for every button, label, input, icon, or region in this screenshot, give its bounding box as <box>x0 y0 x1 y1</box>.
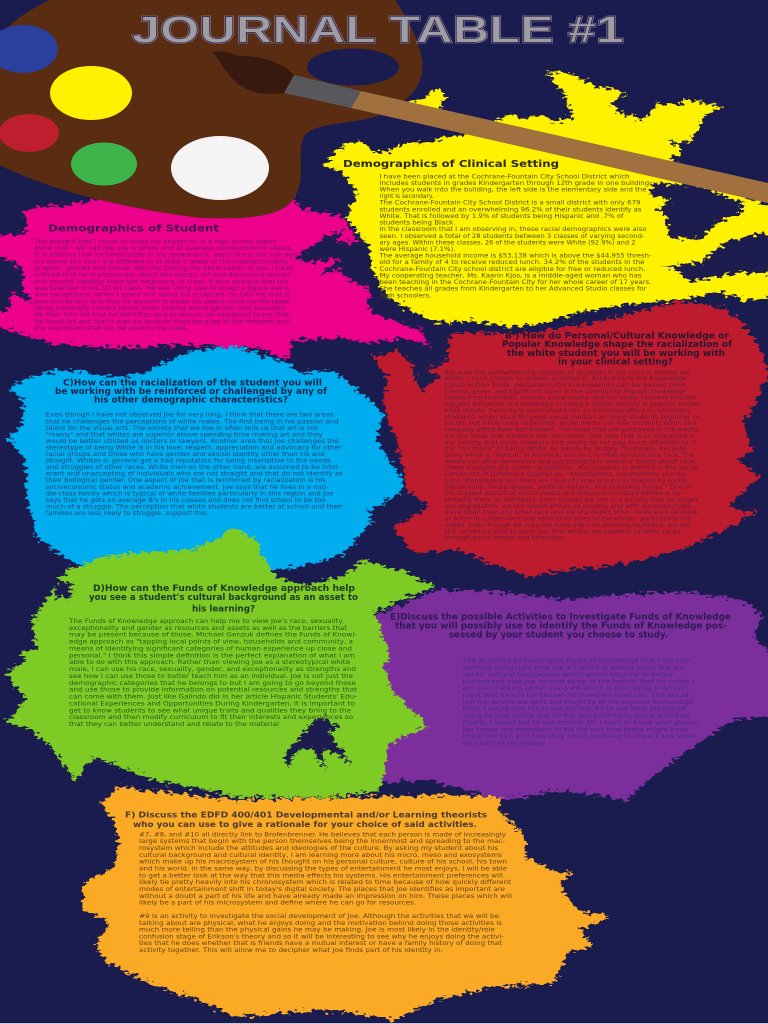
heading: question E <box>390 613 731 640</box>
body text: clinical setting: My cooperating teacher, Ms. Kaarin Kjos, is a middle-aged woman who has <box>380 272 642 280</box>
body text: question B answer: media can often generalize and put thoughts in viewers' minds about race. <box>444 457 696 465</box>
paint well: yellow <box>50 66 132 120</box>
heading: question F: F) Discuss the EDFD 400/401 Developmental and/or Learning theorists <box>125 811 487 820</box>
body text: student: graphic, gender and sexual identity. During my observation of Joe, I have <box>34 264 293 272</box>
body text: question F answer: modes of entertainment shift in today's digital society. The places that Joe identifies as important are <box>139 885 505 893</box>
body text: clinical setting: were Hispanic (7.1%). <box>380 245 456 253</box>
body text: clinical setting: right is secondary. <box>380 192 434 200</box>
body text: question F answer: ties that he does whether that is friends have a mutual interest or have a family history of doing that <box>139 939 503 947</box>
body text: question B answer: still communicated to each day that whites are superior to other races <box>444 527 681 535</box>
body text: question C answer: would be better utilized as doctors or lawyers. Another area that Joe challenges the <box>46 437 339 445</box>
panel: C racialization challenged (blue splat) <box>6 345 403 575</box>
body text: question D answer: male, I can use his race, sexuality, gender, and exceptionality as strengths and <box>69 665 356 673</box>
heading: demographics of student: Demographics of Student <box>48 224 219 235</box>
body text: question E answer: ment that he and his household members most use. This would <box>463 691 689 699</box>
body text: clinical setting <box>378 172 652 299</box>
body text: question D answer: get to know students to see what unique traits and qualities they bring to the <box>69 706 351 714</box>
body text: question D answer: demographic categories that he belongs to but I am going to go beyond those <box>69 679 356 687</box>
body text: question E answer: dents' cultural background which would help me to better <box>463 670 674 678</box>
body text: clinical setting: The Cochrane-Fountain City School District is a small district with only 679 <box>378 199 640 207</box>
body text: question B answer: Because the overwhelming majority of students in my clinical setting are <box>444 368 690 376</box>
body text: question C answer: much of a struggle. The perception that white students are better at school and their <box>46 502 343 510</box>
body text: question C answer: talent for the visual arts. The society that we live in often tells us that art is not <box>46 424 318 432</box>
orange paint splat <box>83 787 609 1020</box>
body text: question C answer: socioeconomic status and academic achievement. Joe says that he lives in a mid- <box>46 483 329 491</box>
body text: question B answer: males. Even though we may not have signs on drinking fountains, we are <box>444 521 690 529</box>
body text: question B answer: biggest influence of knowledge in today's digital society is popular knowl- <box>444 400 701 408</box>
body text: student: He then told me that he identifies as a bi-sexual. He explained to me that <box>34 311 290 319</box>
body text: student: more that I will call Joe. Joe is White and of average socioeconomic status. <box>34 244 293 252</box>
body text: question D answer: The Funds of Knowledge approach can help me to view Joe's race, sexuality, <box>68 617 345 625</box>
body text: clinical setting: In the classroom that I am observing in, these racial demographics were also <box>380 225 647 233</box>
body text: clinical setting: When you walk into the building, the left side is the elementary side and the <box>380 186 647 194</box>
body text: question F answer: without a doubt a part of his life and have already made an impression on him. These places which will <box>139 892 512 900</box>
body text: clinical setting: been teaching in the Cochrane-Fountain City for her whole career of 17 years. <box>380 278 652 286</box>
body text: question D answer: cational Experiences and Opportunities During Kindergarten, it is important to <box>69 700 355 708</box>
body text: question D answer: means of identifying significant categories of human experience up close and <box>69 644 352 652</box>
body text: clinical setting: White. That is followed by 1.9% of students being Hispanic and .7% of <box>380 212 624 220</box>
body text: question B answer: Constructs of Difference Graphic as, "expectations, assumptions, percep- <box>444 470 687 478</box>
body text: question D answer: and use those to provide information on potential resources and strengths that <box>69 686 358 694</box>
body text: question F answer: likely tie pretty heavily into his chronosystem which is related to time because of how quickly different <box>139 878 512 886</box>
heading: question F <box>125 811 487 829</box>
body text: question B answer: tions, stereotypes and fears we have of racial groups as shaped by social <box>444 476 687 484</box>
body text: question E answer: tell me where Joe gets the majority of his popular knowledge <box>463 698 694 706</box>
heading: question D: you see a student's cultural background as an asset to <box>89 593 358 603</box>
body text: question D answer: edge approach as "tapping local points of view, households and community, a <box>69 638 353 646</box>
body text: question B answer: being white is "normal" in America, and so it is often ignored as a race. The <box>444 451 694 459</box>
body text: question B answer: These thoughts are called racialization. Racialization is defined in the Social <box>443 464 699 472</box>
body text: clinical setting: high schoolers. <box>380 291 432 299</box>
body text: student: It is obvious that he takes pride in his appearance, particularly his hair and <box>34 251 297 259</box>
body text: question B answer: the biggest ways that social media and television racialize whites is by <box>444 489 681 497</box>
body text: question E answer: from. I would also like to use activity #9 to see what Joe enjoys <box>463 705 686 713</box>
body text: student <box>33 237 297 332</box>
body text: clinical setting: Cochrane-Fountain City school district are eligible for free or reduced lunch. <box>380 265 646 273</box>
body text: student: The student that I chose to focus my project on is a high school sopho- <box>33 237 279 245</box>
heading: question B: B ) How do Personal/Cultural Knowledge or <box>505 331 730 341</box>
body text: student: noticed that he is passionate about two things, art and discussing sexual <box>34 271 290 279</box>
brush handle <box>351 91 768 203</box>
body text: question F answer: and his world. In the same way, by discussing the types of entertainment he most enjoys, I will be able <box>139 864 507 872</box>
panel: D funds of knowledge (green splat) <box>6 527 435 797</box>
heading: question D <box>89 584 358 615</box>
body text: question C answer: "manly" and that whites are superior above spending time making art and they <box>46 430 323 438</box>
body text: student: was non-binary and that he wanted to make his peers more comfortable <box>34 297 289 305</box>
body text: clinical setting: students enrolled and an overwhelming 96.2% of their students identify as <box>380 205 642 213</box>
body text: question B answer: issues, but when used negatively, social media can tear students down and <box>444 419 696 427</box>
body text: question B answer: are the ideas that students will internalize. One idea that is so engrained in <box>444 432 695 440</box>
paint well: green <box>71 142 137 186</box>
body text: question B answer: edge outlets. Particularly social media has an enormous effect on secondary <box>444 406 691 414</box>
body text: clinical setting: students being Black. <box>380 219 456 227</box>
heading: question D: his learning? <box>192 605 255 615</box>
panel: demographics of student (pink splat) <box>0 195 430 360</box>
body text: student: the expression that can be used in the class. <box>34 324 188 332</box>
purple paint splat <box>365 590 768 800</box>
body text: question B answer: our society that most students and adults do not pay much attention to is <box>444 438 697 446</box>
body text: question C answer: racial groups and those who have gender and sexual identity other than cis and <box>46 450 325 458</box>
icon: paint brush <box>212 51 768 203</box>
title: JOURNAL TABLE #1 <box>132 10 624 52</box>
body text: question E answer: Joe thinks are important in his life and how these might have <box>462 725 689 733</box>
body text: student: he loved Art and that it was his favorite class because of the freedom and <box>34 317 289 325</box>
body text: clinical setting: old for a family of 4 to receive reduced lunch. 34.2% of the students in the <box>380 258 645 266</box>
paint well: white <box>171 136 269 200</box>
yellow paint splat <box>323 72 768 327</box>
panel: demographics of clinical setting (yellow splat) <box>323 72 768 327</box>
body text: question F answer: #9 is an activity to investigate the social development of Joe. Although the activities that we will be <box>139 912 499 920</box>
body text: question B answer: through social media and television. <box>444 534 566 542</box>
body text: question B answer: more often than any other race and we still depict other races such as black <box>444 508 699 516</box>
body text: question B answer: or Asian in subservient and secondary roles to the whites, particularly the <box>444 515 691 523</box>
body text: question F answer: confusion stage of Erikson's theory and so it will be interesting to see why he enjoys doing the activi- <box>139 932 504 940</box>
heading: question E: that you will possibly use to identify the Funds of Knowledge pos- <box>395 622 727 632</box>
body text: question F answer: much more telling than the physical gains he may be making. Joe is most likely in the identity/role <box>139 926 495 934</box>
body text: clinical setting: includes students in grades Kindergarten through 12th grade in one building. <box>380 179 652 187</box>
icon: artist palette with paint wells <box>0 0 422 218</box>
blue paint splat <box>6 345 403 575</box>
body text: clinical setting: I have been placed at the Cochrane-Fountain City School District which <box>380 172 630 180</box>
body text: clinical setting: She teaches all grades from Kindergarten to her Advanced Studio classes for <box>380 285 647 293</box>
brush ferrule <box>284 75 361 108</box>
body text: question E answer: Finally, I would like to use activity 10. I want to know what places <box>463 718 698 726</box>
body text: question C answer: straight. Whites in general get a bad reputation for being insensitive to the needs <box>46 457 331 465</box>
body text: question B answer: interactions, media images, political rhetoric, and economic forces." One of <box>444 483 692 491</box>
body text: question E answer: The Activities to Investigate Funds of Knowledge that I am con- <box>462 657 692 665</box>
body text: clinical setting: The average household income is $53,138 which is above the $44,955 thresh- <box>378 252 652 260</box>
body text: question F answer: talking about are physical, what he enjoys doing and the motivation behind doing those activities is <box>139 919 503 927</box>
heading: question E: sessed by your student you choose to study. <box>449 630 668 640</box>
body text: question E answer: impacted him and how they could continue to impact and serve <box>463 732 697 740</box>
body text: question D answer: exceptionality and gender as resources and assets as well as the barriers that <box>69 624 348 632</box>
body text: question D answer <box>68 617 358 728</box>
body text: question E answer: sidering using right now are #7 which is asking about the stu- <box>463 664 687 672</box>
body text: question C answer: erant and unaccepting of individuals who are not straight and that do not identify as <box>46 470 343 478</box>
body text: question E answer <box>462 657 698 747</box>
panel: B racialization (red splat) <box>373 302 768 577</box>
title: JOURNAL TABLE #1 <box>132 10 624 52</box>
palette thumb hole <box>307 48 399 86</box>
body text: question F answer: #7, #8, and #10 all directly link to Brofenbrenner. He believes that each person is made of increasingly <box>139 830 506 838</box>
brush bristles <box>212 51 294 94</box>
body text: question B answer: parents, peers, and significant other in the community. Popular knowledge <box>444 387 685 395</box>
body text: question D answer: personal." I think this simple definition is the perfect explanation of what I am <box>69 651 355 659</box>
body text: question B answer: comes from television, movies, social media, and the news. I believe that the <box>444 394 696 402</box>
body text: question E answer: doing to stay active and for fun and potentially social activities. <box>463 712 692 720</box>
body text: question C answer: that he challenges the perceptions of white males. The first being in his passion and <box>46 417 339 425</box>
body text: question F answer: activity together. This will allow me to decipher what Joe finds part of his identity in. <box>139 946 443 954</box>
body text: student: was talented in his 3D art class. He was using clay to sculpt a figure and it <box>34 284 290 292</box>
body text: question C answer: says that he gets on average B's in his classes and does not find school to be too <box>46 496 326 504</box>
body text: student: his shoes. Joe and I are different in at least 2 areas of the intersectionality <box>34 257 289 265</box>
body text: question F answer: rosystem which include the attitudes and ideologies of the culture. By asking my student about his <box>139 844 499 852</box>
body text: question D answer: can come with them. Just like Galindo did in her article Hispanic Students' Edu- <box>69 693 357 701</box>
heading: question C: his other demographic characteristics? <box>94 396 288 406</box>
body text: question C answer <box>46 411 343 517</box>
panel: F developmental theorists (orange splat) <box>83 787 609 1020</box>
heading: question B: in your clinical setting? <box>558 358 673 368</box>
body text: question D answer: that they can better understand and relate to the material <box>69 720 279 728</box>
heading: demographics of clinical setting: Demographics of Clinical Setting <box>343 159 559 170</box>
body text: question E answer: understand how Joe formed some of the beliefs that he holds. I <box>463 677 695 685</box>
heading: question D: D)How can the Funds of Knowledge approach help <box>93 584 355 594</box>
heading: question B: the white student you will be working with <box>507 349 725 359</box>
green paint splat <box>6 527 435 797</box>
pink paint splat <box>0 195 430 360</box>
body text: question D answer: able to do with this approach. Rather than viewing Joe as a stereotypical white <box>69 658 350 666</box>
body text: question F answer: which make up his macrosystem of his thought on his personal culture, culture of his school, his town <box>139 858 507 866</box>
body text: question F answer: to get a better look at the way that this media effects his systems. His entertainment preferences will <box>139 871 503 879</box>
body text: question B answer: has segregation, we still depict whites as wealthy and with successful jobs <box>444 502 692 510</box>
body text: question C answer: families are less likely to struggle, support this. <box>46 509 209 517</box>
body text: question D answer: may be present because of those. Michael Genzuk defines the Funds of Knowl- <box>69 631 357 639</box>
red paint splat <box>373 302 768 577</box>
body text: question F answer <box>139 830 512 954</box>
body text: question E answer: am also thinking about using #8 which is discussing entertain- <box>463 684 690 692</box>
body text: question D answer: classroom and then modify curriculum to fit their interests and experiences so <box>69 713 353 721</box>
body text: question B answer: showing them as dominant. Even though we live in a society that no longer <box>444 496 699 504</box>
body text: question B answer: white, I have chosen to answer question B. According to the Knowledge <box>444 375 686 383</box>
paint well: blue <box>0 25 58 73</box>
body text: student: using politically correct terms when talking about gender and sexuality. <box>34 304 286 312</box>
body text: question C answer: their biological gender. One aspect of Joe that is reinforced by racialization is his <box>46 476 326 484</box>
body text: question C answer: stereotype of being White is in his love, respect, appreciation and advocacy for other <box>46 444 342 452</box>
body text: question E answer: as a fund of knowledge. . <box>463 739 552 747</box>
body text: question F answer: large systems that begin with the person themselves being the innermost and spreading to the mac- <box>139 837 505 845</box>
heading: question C: be working with be reinforced or challenged by any of <box>55 387 327 397</box>
body text: student: and gender identity. From the beginning of class, it was obvious that Joe <box>34 277 288 285</box>
heading: question B: Popular Knowledge shape the racialization of <box>502 340 732 350</box>
body text: student: was exceptional. When I asked him about his sculpture, he told me that it <box>34 291 290 299</box>
heading: question B <box>502 331 732 368</box>
body text: clinical setting: ary ages. Within these classes, 26 of the students were White (92.9%) and 2 <box>380 238 636 246</box>
palette board <box>0 0 422 218</box>
body text: question F answer: likely be a part of his microsystem and define where he can go for resources. <box>139 899 416 907</box>
body text: question B answer: Construction Table, personal/cultural knowledge can be gained from <box>444 381 685 389</box>
body text: question D answer: see how I can use those to better teach him as an individual. Joe is not just the <box>69 672 353 680</box>
body text: question C answer: and struggles of other races. White men on the other hand, are assumed to be intol- <box>46 463 340 471</box>
body text: clinical setting: seen. I observed a total of 28 students between 3 classes of varying second- <box>380 232 644 240</box>
panel: E activities (purple splat) <box>365 590 768 800</box>
heading: question C: C)How can the racialization of the student you will <box>63 378 322 388</box>
body text: question B answer: students, when used for good social media can bring students together on <box>444 413 701 421</box>
heading: question C <box>55 378 327 406</box>
paint well: red <box>0 114 59 152</box>
heading: question E: E)Discuss the possible Activities to Investigate Funds of Knowledge <box>390 613 731 623</box>
body text: question B answer: seriously affect their self-esteem. The ideas that are portrayed in the media <box>444 426 698 434</box>
heading: question F: who you can use to give a rationale for your choice of said activities. <box>133 820 477 829</box>
body text: question B answer <box>443 368 701 542</box>
body text: question C answer: Even though I have not observed Joe for very long, I think that there are two areas <box>46 411 334 419</box>
body text: question B answer: the "normalcy" of being White. As noted, by Audrey Thompson, because <box>444 445 687 453</box>
body text: question F answer: cultural background and cultural identity, I am learning more about his micro, meso and exosystems <box>139 851 503 859</box>
body text: question C answer: dle-class family which is typical of white families particularly in this region and Joe <box>46 489 334 497</box>
